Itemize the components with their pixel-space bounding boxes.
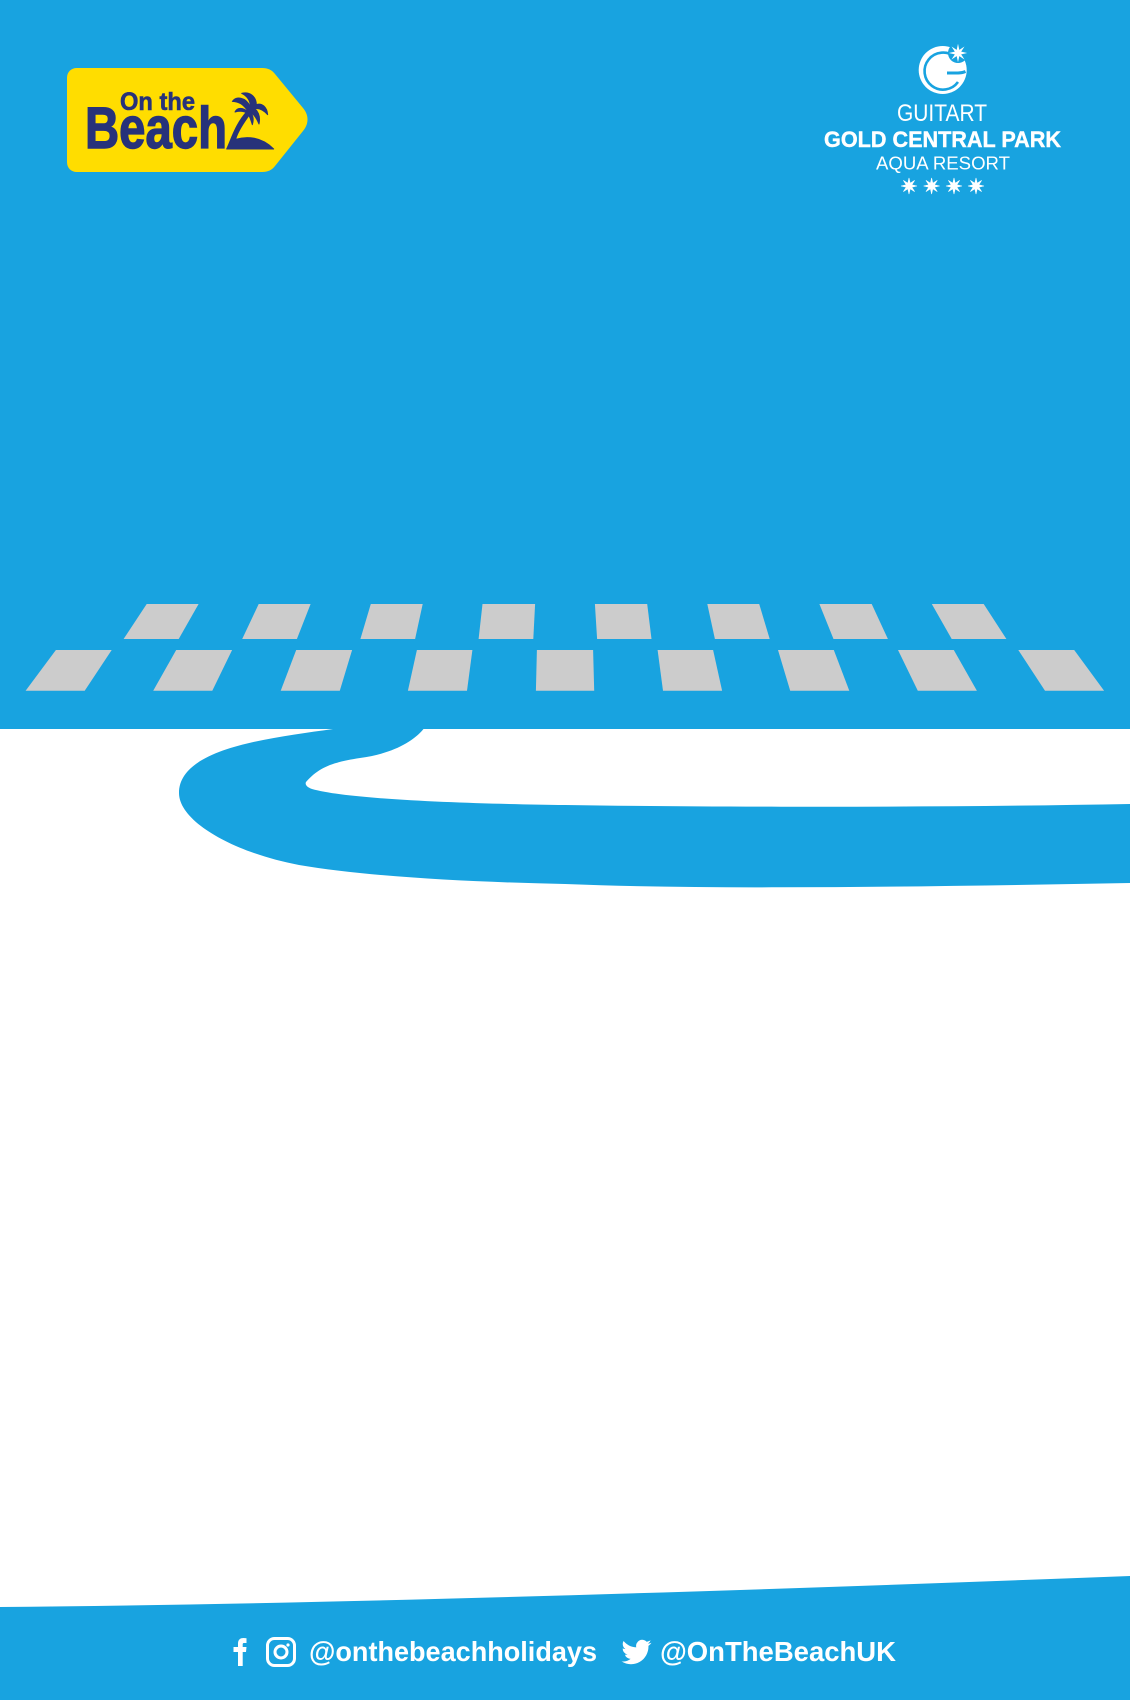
icon: instagram [268,1638,294,1666]
icon: palm tree island [227,93,274,149]
icon: four rating stars [901,178,984,194]
road: winding blue path [179,729,1130,887]
text: instagram and facebook handle: @onthebeachholidays [309,1636,597,1667]
logo wordmark: On the: On the [120,88,195,116]
resort name: Gold Central Park: GOLD CENTRAL PARK [824,127,1061,152]
icon: twitter [622,1640,651,1664]
icon: G emblem with star [919,43,968,94]
logo wordmark: Beach: Beach [85,96,227,161]
panel: blue footer band [0,1576,1130,1700]
icon: facebook [234,1638,246,1666]
crossing tiles: grey checker pattern [26,604,1104,691]
panel: blue header [0,0,1130,729]
resort name: Aqua Resort: AQUA RESORT [876,152,1010,174]
logo tag shape [67,68,308,172]
logo: On the Beach [67,68,308,172]
logo: Guitart Gold Central Park Aqua Resort [824,43,1061,194]
resort name: Guitart: GUITART [897,100,987,127]
text: twitter handle: @OnTheBeachUK [660,1636,896,1667]
